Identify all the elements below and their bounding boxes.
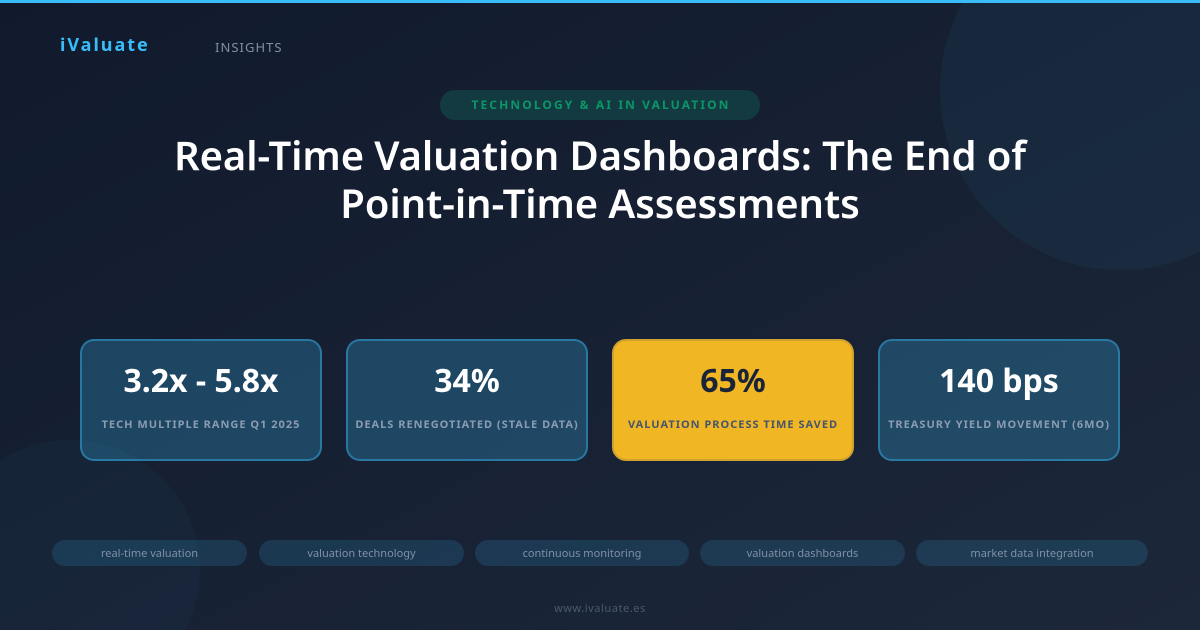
stat card: time saved highlight: VALUATION PROCESS TIME SAVED bbox=[628, 417, 838, 432]
stat card: deals renegotiated: 34% bbox=[434, 359, 500, 402]
tag: valuation dashboards: valuation dashboards bbox=[747, 546, 858, 561]
decorative circle: bottom left bbox=[0, 440, 200, 630]
stat card: deals renegotiated bbox=[346, 339, 588, 461]
category badge bbox=[440, 90, 760, 120]
tag: market data integration: market data integration bbox=[970, 546, 1094, 561]
footer url: www.ivaluate.es bbox=[554, 601, 646, 616]
tag: valuation technology: valuation technology bbox=[307, 546, 416, 561]
stat card: tech multiple range bbox=[80, 339, 322, 461]
stat card: time saved highlight: 65% bbox=[700, 359, 766, 402]
stat card: treasury yield bbox=[878, 339, 1120, 461]
top accent bar bbox=[0, 0, 1200, 3]
tag: real-time valuation: real-time valuation bbox=[101, 546, 198, 561]
title: Real-Time Valuation Dashboards: The End of bbox=[174, 127, 1026, 182]
stat card: treasury yield: 140 bps bbox=[939, 359, 1059, 402]
stat card: tech multiple range: TECH MULTIPLE RANGE Q1 2025 bbox=[102, 417, 300, 432]
stat card: treasury yield: TREASURY YIELD MOVEMENT (6MO) bbox=[888, 417, 1110, 432]
stat card: deals renegotiated: DEALS RENEGOTIATED (STALE DATA) bbox=[355, 417, 579, 432]
tag: continuous monitoring: continuous monitoring bbox=[523, 546, 641, 561]
stat card: time saved highlight bbox=[612, 339, 854, 461]
brand logo: iValuate bbox=[60, 33, 150, 57]
tag: valuation technology bbox=[259, 540, 464, 566]
category badge: TECHNOLOGY & AI IN VALUATION bbox=[471, 96, 731, 113]
tag: market data integration bbox=[916, 540, 1148, 566]
tag: continuous monitoring bbox=[475, 540, 689, 566]
title bbox=[174, 127, 1028, 230]
stat card: tech multiple range: 3.2x - 5.8x bbox=[123, 359, 279, 402]
tag: valuation dashboards bbox=[700, 540, 905, 566]
section label: INSIGHTS bbox=[215, 38, 283, 56]
title: Point-in-Time Assessments bbox=[340, 175, 860, 230]
tag: real-time valuation bbox=[52, 540, 247, 566]
decorative circle: top right bbox=[940, 0, 1200, 270]
